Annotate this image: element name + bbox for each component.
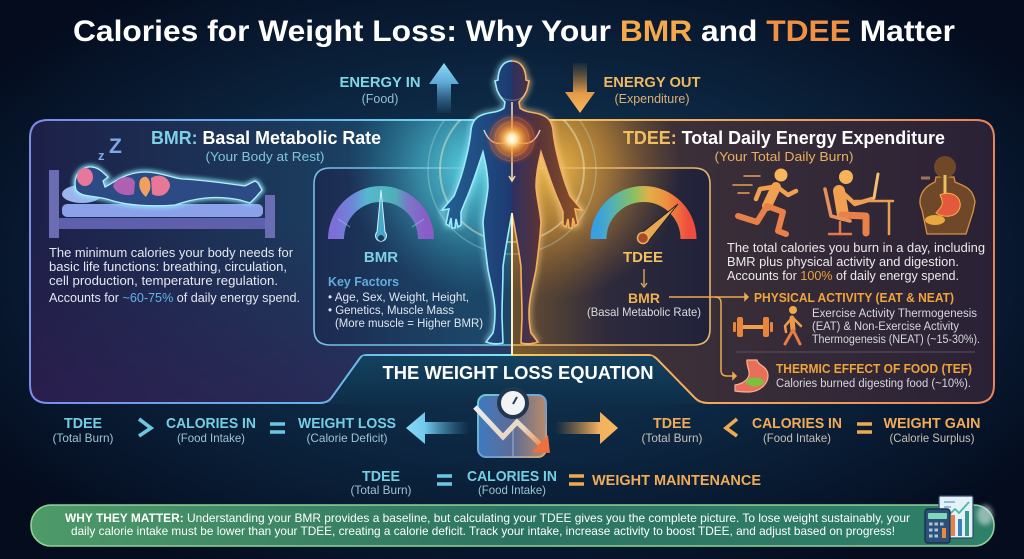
panel: TDEE gauge <box>512 168 710 345</box>
icon: sleeping zZ <box>98 135 122 163</box>
label: BMR: BMR <box>628 290 660 306</box>
gauge label: TDEE: TDEE <box>623 249 663 266</box>
equation header panel <box>330 356 698 404</box>
equation: weight loss: TDEE <box>64 415 102 432</box>
figure: central body glow <box>442 61 582 342</box>
text: physical activity description <box>812 308 980 346</box>
figure: energy core <box>486 113 538 165</box>
icon: sleeping zZ: Z <box>109 135 122 158</box>
callout: why they matter <box>31 496 994 546</box>
heading: TDEE: TDEE: Total Daily Energy Expenditure <box>623 127 945 148</box>
arrows: BMR to components <box>669 294 748 379</box>
equation: weight maintenance: TDEE <box>362 468 400 485</box>
energy in label: (Food) <box>362 92 398 106</box>
text: TDEE description: BMR plus physical activity and digestion. <box>727 255 959 269</box>
title: Calories for Weight Loss: Why Your BMR and TDEE Matter <box>73 15 955 48</box>
heading: physical activity: PHYSICAL ACTIVITY (EAT & NEAT) <box>754 291 954 305</box>
equation: weight loss: (Calorie Deficit) <box>306 431 388 445</box>
decorative sparkle <box>977 505 993 525</box>
arrow: energy out <box>565 63 595 113</box>
list: key factors <box>328 292 483 330</box>
energy in label: ENERGY IN <box>340 74 420 91</box>
callout text: WHY THEY MATTER: Understanding your BMR provides a baseline, but calculating your TDEE gives you the complete picture. To lose weight sustainably, your <box>65 511 910 525</box>
gauge label: BMR: BMR <box>364 249 398 266</box>
arrow: TDEE to BMR <box>641 269 647 287</box>
equation: weight maintenance: CALORIES IN <box>467 468 557 485</box>
list: key factors: • Age, Sex, Weight, Height, <box>328 292 469 304</box>
equation: weight gain: (Total Burn) <box>642 431 702 445</box>
text: BMR description: basic life functions: breathing, circulation, <box>49 260 287 274</box>
panel: BMR <box>30 120 512 403</box>
text: BMR description: Accounts for ~60-75% of daily energy spend. <box>49 291 300 305</box>
energy out label <box>604 74 700 106</box>
figure: glow rings behind body <box>427 120 597 255</box>
icon: calculator <box>925 509 950 543</box>
equation: weight loss: CALORIES IN <box>166 415 256 432</box>
text: physical activity description: (EAT) & Non-Exercise Activity <box>812 321 959 333</box>
equation: weight gain: TDEE <box>653 415 691 432</box>
energy out label: (Expenditure) <box>614 92 690 106</box>
icon: sleeping zZ: z <box>98 148 105 163</box>
chart: TDEE gauge <box>598 194 688 244</box>
icon: person at desk <box>825 170 893 234</box>
equation: weight gain: (Calorie Surplus) <box>890 431 975 445</box>
equation: weight gain: CALORIES IN <box>752 415 842 432</box>
text: TDEE description: Accounts for 100% of daily energy spend. <box>727 269 959 283</box>
icon: walking person <box>785 306 801 344</box>
equation: weight maintenance: (Total Burn) <box>350 483 412 497</box>
arrow: to weight loss <box>406 412 470 444</box>
equation: weight maintenance <box>350 468 761 497</box>
icon: dumbbell <box>733 317 773 337</box>
heading: thermic effect: THERMIC EFFECT OF FOOD (TEF) <box>776 362 972 376</box>
energy in label <box>340 74 420 106</box>
text: TDEE description <box>727 241 985 283</box>
label: basal metabolic rate: (Basal Metabolic Rate) <box>587 305 701 319</box>
icon: sleeping person on bed <box>49 167 275 238</box>
equation: weight loss <box>52 415 396 445</box>
icon: stomach <box>735 360 768 392</box>
list: key factors: • Genetics, Muscle Mass <box>328 305 454 317</box>
figure: body left half <box>442 61 512 344</box>
energy out label: ENERGY OUT <box>604 74 700 91</box>
panel: TDEE <box>512 120 994 403</box>
text: BMR description: The minimum calories your body needs for <box>49 246 293 260</box>
text: physical activity description: Thermogenesis (NEAT) (~15-30%). <box>812 334 980 346</box>
arrow: energy in <box>429 63 459 113</box>
subheading: TDEE: (Your Total Daily Burn) <box>714 149 854 164</box>
text: BMR description <box>49 246 300 305</box>
panel: BMR gauge and key factors <box>314 168 512 345</box>
text: physical activity description: Exercise Activity Thermogenesis <box>812 308 977 320</box>
equation: weight gain: WEIGHT GAIN <box>884 415 980 432</box>
text: thermic effect description: Calories burned digesting food (~10%). <box>776 378 971 390</box>
icon: runner <box>733 168 796 234</box>
arrow: to weight gain <box>555 412 618 444</box>
text: TDEE description: The total calories you burn in a day, including <box>727 241 985 255</box>
equation: weight gain: (Food Intake) <box>763 431 831 445</box>
equation: weight loss: (Food Intake) <box>177 431 245 445</box>
equation: weight maintenance: WEIGHT MAINTENANCE <box>592 473 761 489</box>
list: key factors: (More muscle = Higher BMR) <box>335 318 483 330</box>
figure: centre line <box>484 92 540 355</box>
callout text <box>65 511 910 538</box>
heading: weight loss equation: THE WEIGHT LOSS EQUATION <box>382 363 654 383</box>
figure: body right half <box>512 61 582 344</box>
equation: weight loss: (Total Burn) <box>52 431 114 445</box>
equation: weight gain <box>642 415 980 445</box>
callout text: daily calorie intake must be lower than your TDEE, creating a calorie deficit. Track your intake, increase activity to boost TDEE, and adjust based on progress! <box>71 524 895 538</box>
icon: person eating <box>920 156 975 234</box>
icon: scale with downward trend <box>475 389 550 457</box>
equation: weight maintenance: (Food Intake) <box>478 483 546 497</box>
heading: key factors: Key Factors <box>328 275 399 289</box>
chart: BMR gauge <box>336 190 426 241</box>
heading: BMR: BMR: Basal Metabolic Rate <box>151 127 381 148</box>
icon: chart document <box>939 496 973 538</box>
subheading: BMR: (Your Body at Rest) <box>206 149 324 164</box>
text: BMR description: cell production, temperature regulation. <box>49 274 278 288</box>
equation: weight loss: WEIGHT LOSS <box>298 415 396 432</box>
